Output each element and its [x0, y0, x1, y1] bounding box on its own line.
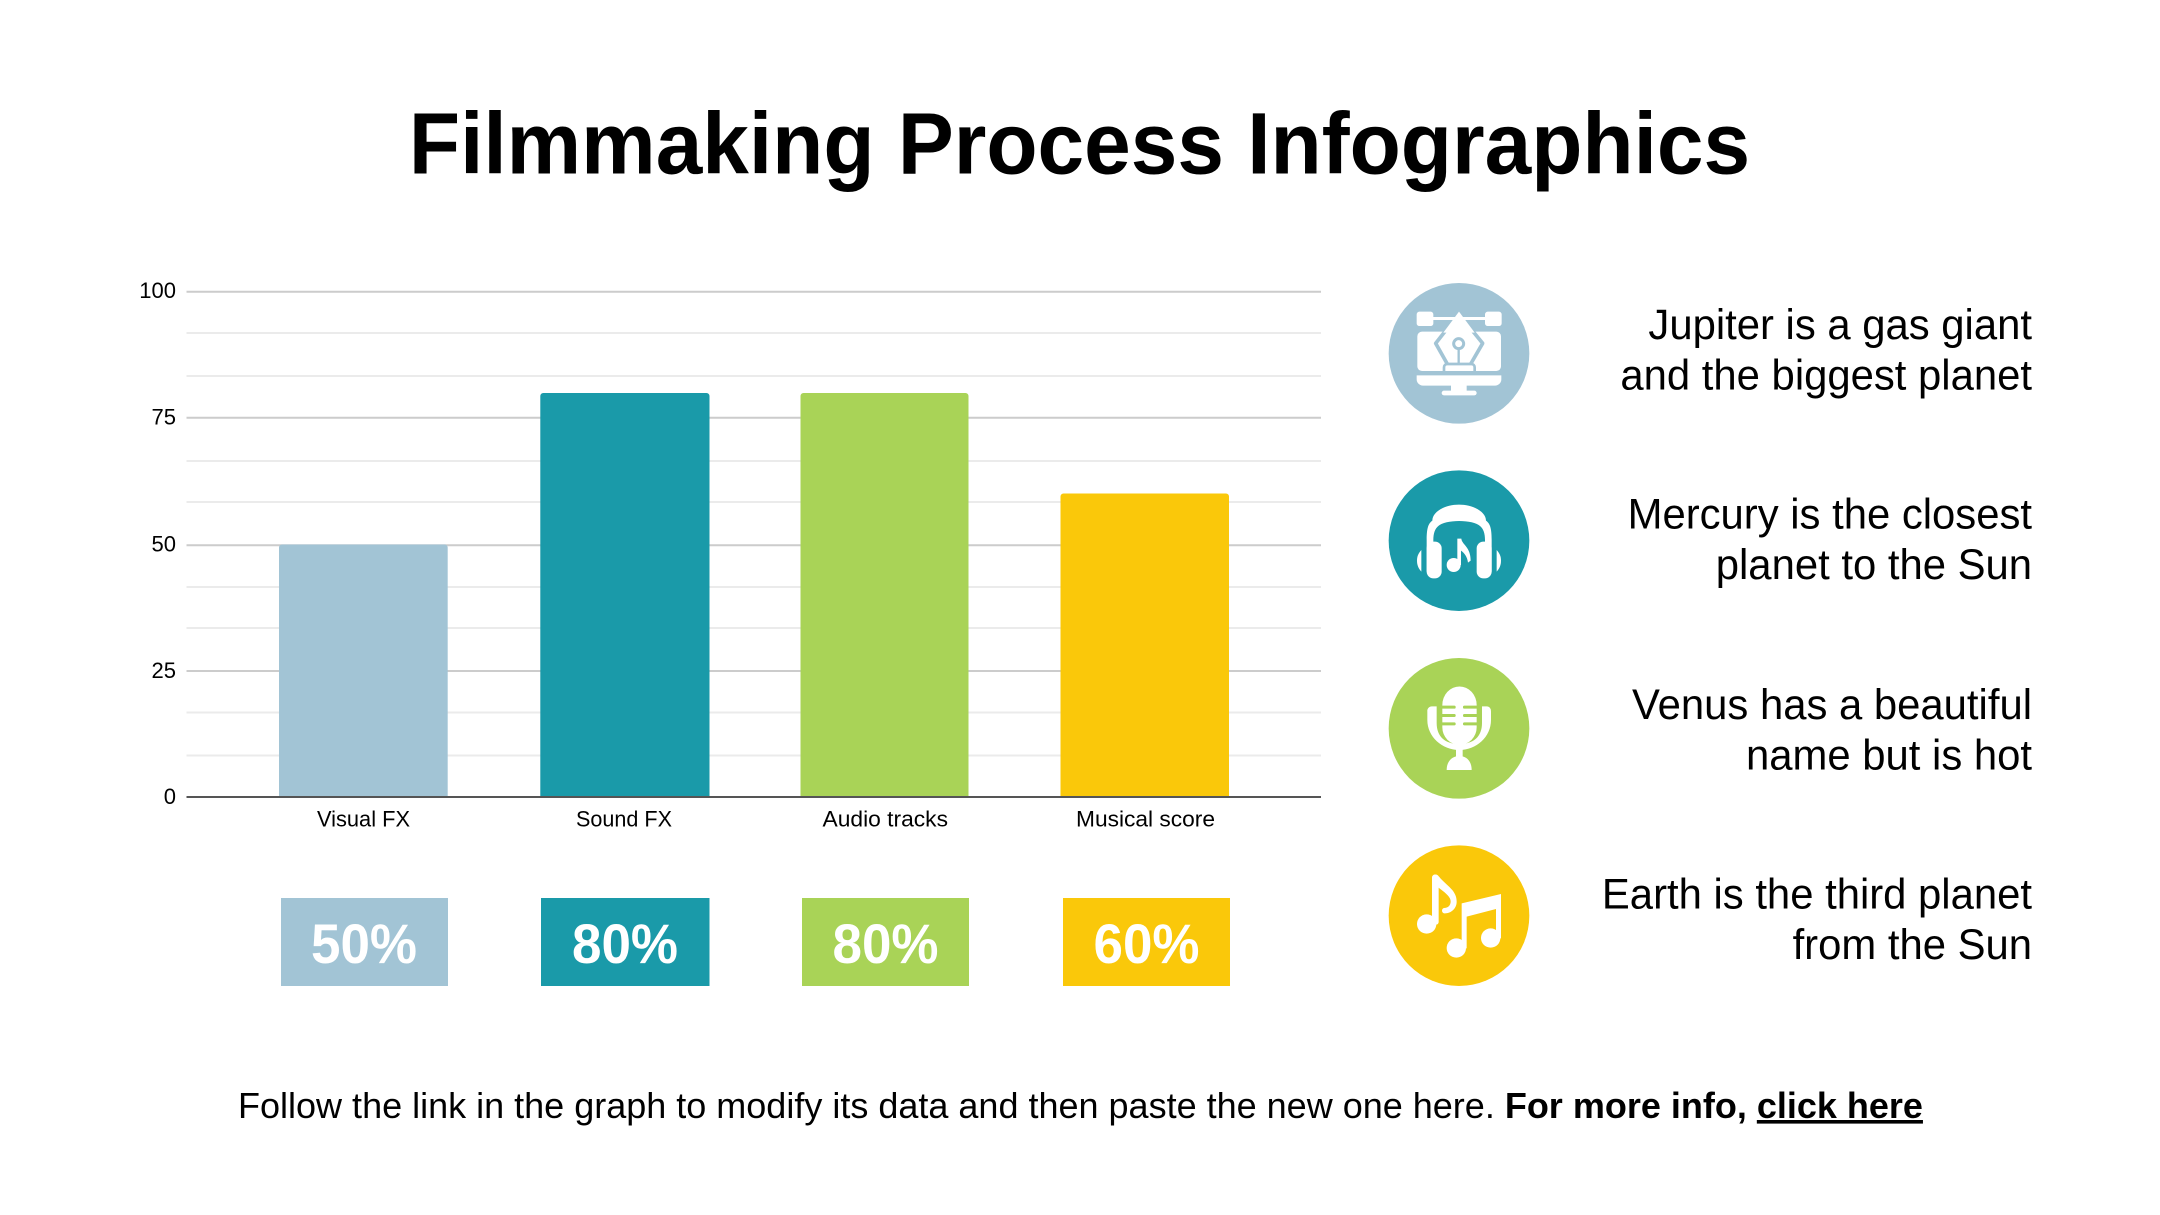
- y axis labels: 75: [152, 404, 176, 430]
- value badge: 80% audio: 80%: [832, 912, 938, 975]
- text: Earth: Earth is the third planet: [1602, 870, 2032, 918]
- value badge: 50%: 50%: [311, 912, 417, 975]
- category labels: Musical score: [1076, 806, 1215, 832]
- icon: music notes: [1389, 845, 1529, 986]
- category labels: Sound FX: [576, 806, 672, 832]
- value badge: 80% sound: [541, 898, 710, 986]
- y axis labels: 50: [152, 532, 176, 556]
- text: Earth: from the Sun: [1793, 920, 2032, 968]
- text: Mercury: planet to the Sun: [1716, 540, 2032, 588]
- footer note: Follow the link in the graph to modify its data and then paste the new one here. For more info, click here: [238, 1085, 1923, 1126]
- y axis labels: 25: [152, 658, 176, 683]
- text: Earth: [1602, 870, 2032, 968]
- text: Venus: name but is hot: [1746, 731, 2032, 779]
- category labels: Audio tracks: [822, 806, 948, 832]
- title: Filmmaking Process Infographics: [409, 96, 1750, 193]
- y axis labels: 100: [139, 278, 176, 303]
- value badge: 80% sound: 80%: [572, 912, 678, 975]
- y axis labels: [139, 278, 176, 809]
- icon: headphones with note: [1389, 470, 1529, 611]
- text: Jupiter: [1620, 300, 2032, 399]
- bar: Audio tracks: [800, 393, 968, 797]
- text: Mercury: Mercury is the closest: [1628, 490, 2032, 538]
- text: Jupiter: Jupiter is a gas giant: [1648, 300, 2032, 348]
- bar: Musical score: [1060, 494, 1229, 797]
- category labels: [317, 806, 1215, 832]
- value badge: 80% audio: [802, 898, 969, 986]
- y axis labels: 0: [164, 784, 176, 809]
- text: Venus: [1632, 680, 2032, 779]
- text: Jupiter: and the biggest planet: [1620, 351, 2032, 399]
- category labels: Visual FX: [317, 806, 410, 832]
- text: Mercury: [1628, 490, 2032, 588]
- bar chart: [139, 278, 1321, 832]
- icon: monitor with pen nib: [1389, 283, 1529, 424]
- value badge: 60%: 60%: [1094, 912, 1200, 975]
- icon: microphone: [1389, 658, 1529, 799]
- bar: Sound FX: [540, 393, 710, 797]
- value badge: 60%: [1063, 898, 1230, 986]
- bar: Visual FX: [279, 544, 448, 797]
- value badge: 50%: [281, 898, 448, 986]
- text: Venus: Venus has a beautiful: [1632, 680, 2032, 728]
